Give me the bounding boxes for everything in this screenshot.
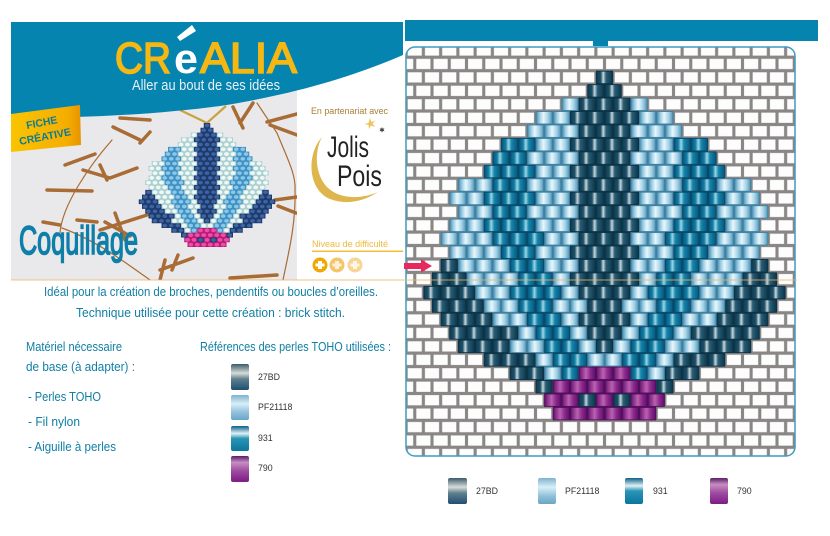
- material list: - Aiguille à perles: [28, 439, 116, 454]
- material list: de base (à adapter) :: [26, 359, 135, 374]
- top bar over the chart: [405, 20, 818, 46]
- ribbon: fiche créative: FICHE: [25, 114, 58, 132]
- legend: below the chart: 27BD: [476, 486, 498, 496]
- legend: below the chart: [448, 478, 752, 504]
- legend: TOHO references: 790: [258, 463, 273, 473]
- header: blue curved band: [11, 22, 403, 118]
- legend: TOHO references: 27BD: [258, 372, 280, 382]
- pendant chain: [180, 106, 226, 123]
- logo: Jolis Pois: Pois: [337, 160, 382, 193]
- tagline: Aller au bout de ses idées: [132, 78, 280, 94]
- guide line: [11, 279, 797, 281]
- logo: Créalia: [115, 25, 298, 83]
- photo: pendant on a plate: [11, 80, 297, 280]
- ribbon: fiche créative: [11, 105, 81, 152]
- logo: Créalia: ALIA: [200, 34, 298, 83]
- legend: below the chart: PF21118: [565, 486, 600, 496]
- material list: - Perles TOHO: [28, 389, 101, 404]
- intro text: Idéal pour la création de broches, pendentifs ou boucles d’oreilles.: [44, 284, 378, 299]
- intro text: [44, 284, 378, 320]
- intro text: Technique utilisée pour cette création : brick stitch.: [76, 305, 345, 320]
- arrow: start row marker: [404, 260, 432, 272]
- legend: TOHO references: [200, 339, 391, 482]
- material list: Matériel nécessaire: [26, 339, 122, 354]
- partner heading: En partenariat avec: [311, 106, 388, 117]
- ribbon: fiche créative: CRÉATIVE: [18, 125, 72, 148]
- material list: - Fil nylon: [28, 414, 80, 429]
- material list: [26, 339, 135, 454]
- chart: brick stitch bead pattern: [398, 44, 812, 474]
- difficulty heading: Niveau de difficulté: [312, 239, 388, 250]
- logo: Créalia: CR: [115, 34, 171, 83]
- branches decoration: [43, 103, 297, 280]
- legend: TOHO references: PF21118: [258, 402, 293, 412]
- legend: below the chart: 931: [653, 486, 668, 496]
- legend: TOHO references: Références des perles TOHO utilisées :: [200, 339, 391, 354]
- title: Coquillage: Coquillage: [19, 219, 138, 263]
- legend: below the chart: 790: [737, 486, 752, 496]
- difficulty rating icons: [312, 258, 362, 272]
- legend: TOHO references: 931: [258, 433, 273, 443]
- logo: Jolis Pois: [312, 118, 384, 202]
- shell pendant: [139, 123, 275, 247]
- logo: Créalia: e: [174, 35, 198, 82]
- logo: Jolis Pois: Jolis: [327, 131, 369, 164]
